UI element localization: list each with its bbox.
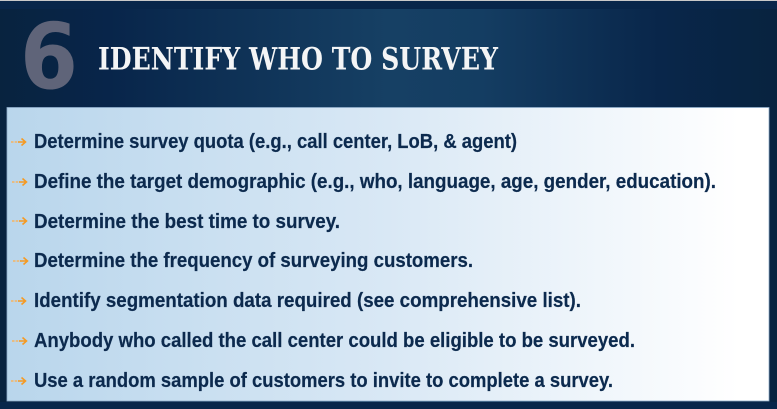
item 1: Determine survey quota (e.g., call center, LoB, & agent) bbox=[34, 131, 517, 153]
step number: 6 bbox=[20, 5, 78, 110]
panel: survey checklist bbox=[7, 108, 769, 401]
item 7: Use a random sample of customers to invite to complete a survey. bbox=[34, 370, 613, 392]
item 5: Identify segmentation data required (see comprehensive list). bbox=[34, 290, 581, 312]
item 2: Define the target demographic (e.g., who, language, age, gender, education). bbox=[34, 171, 716, 193]
item 6: Anybody who called the call center could be eligible to be surveyed. bbox=[34, 330, 635, 352]
title: IDENTIFY WHO TO SURVEY bbox=[98, 42, 499, 78]
item 3: Determine the best time to survey. bbox=[34, 211, 340, 233]
item 4: Determine the frequency of surveying customers. bbox=[34, 250, 473, 272]
